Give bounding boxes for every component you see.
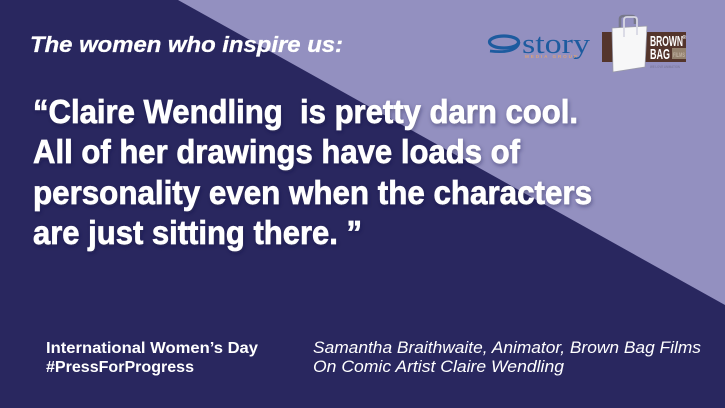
campaign label: International Women’s Day [46, 340, 258, 357]
logo: Brown Bag Films [602, 16, 686, 72]
logo glyph: 9 [490, 36, 519, 52]
quote attribution: On Comic Artist Claire Wendling [313, 357, 565, 376]
logo: 9 Story Media Group [490, 29, 590, 60]
heading: The women who inspire us: [30, 32, 343, 57]
background: lilac diagonal panel [178, 0, 725, 305]
logo registered mark: ® [682, 34, 686, 41]
campaign label: #PressForProgress [46, 359, 194, 376]
logo bag front handle [624, 17, 637, 37]
logo name line 1: BROWN [650, 33, 683, 50]
logo tagline: MEDIA GROUP [525, 54, 577, 59]
quote attribution [313, 338, 701, 376]
quote: are just sitting there. ” [33, 215, 362, 252]
quote: personality even when the characters [33, 175, 592, 212]
logo bag rear handle [620, 16, 635, 30]
quote: “Claire Wendling is pretty darn cool. [33, 94, 578, 131]
logo films tag [672, 48, 686, 59]
logo bag [612, 26, 647, 72]
logo band [602, 32, 686, 62]
logo wordmark: story [522, 29, 590, 60]
quote [33, 94, 592, 252]
logo strapline: WE LOVE ANIMATION [650, 64, 680, 69]
logo name line 2: BAG [650, 46, 670, 63]
quote: All of her drawings have loads of [33, 134, 521, 171]
campaign label [46, 340, 258, 376]
logo films: FILMS [673, 53, 685, 59]
quote attribution: Samantha Braithwaite, Animator, Brown Bag Films [313, 338, 701, 357]
